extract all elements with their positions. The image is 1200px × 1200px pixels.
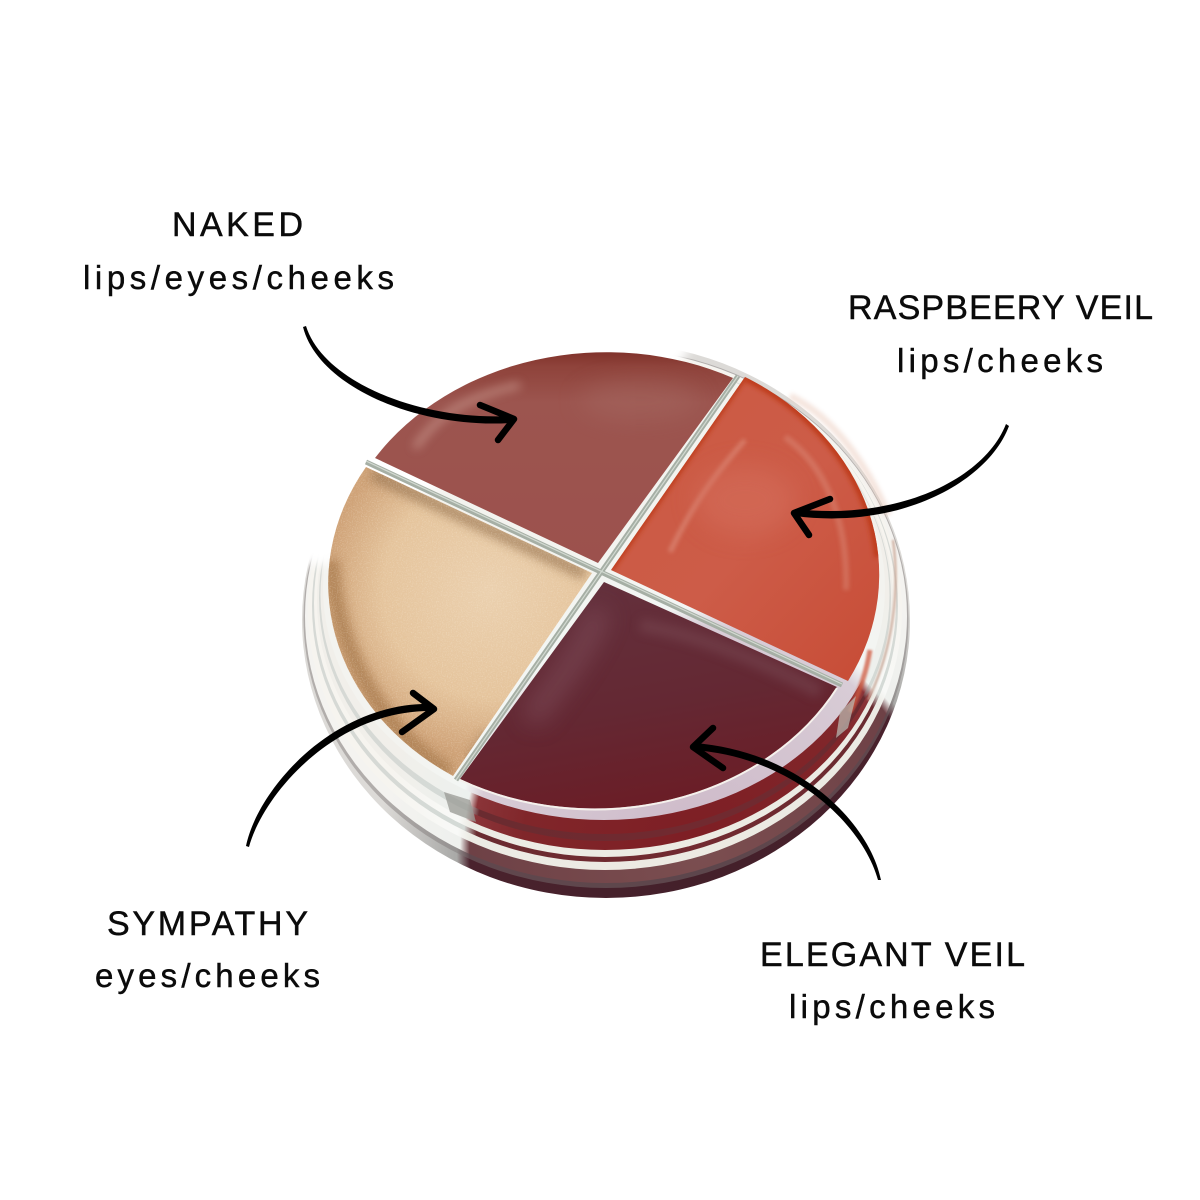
arrow: raspberry veil bbox=[794, 424, 1009, 535]
shade pan: elegant veil bbox=[450, 575, 845, 815]
case lip fragments bbox=[444, 696, 856, 822]
label: naked: lips/eyes/cheeks bbox=[83, 259, 394, 296]
label: raspberry veil: RASPBEERY VEIL bbox=[848, 289, 1153, 327]
reflection of the raspberry shade in the right rim bbox=[790, 396, 896, 712]
shade pan: naked bbox=[375, 352, 733, 563]
shade pan: raspberry veil bbox=[611, 377, 880, 681]
label: elegant veil: ELEGANT VEIL bbox=[760, 936, 1025, 974]
label: raspberry veil bbox=[848, 289, 1153, 379]
arrow: sympathy bbox=[246, 693, 434, 847]
palette compact bbox=[302, 352, 910, 898]
white cover hiding the case at the upper left bbox=[270, 240, 695, 566]
label: naked bbox=[83, 206, 394, 296]
infographic canvas bbox=[85, 212, 1152, 1026]
shade pan: sympathy bbox=[328, 467, 592, 776]
arrow: naked bbox=[303, 326, 514, 440]
label: sympathy: eyes/cheeks bbox=[95, 957, 320, 994]
label: elegant veil: lips/cheeks bbox=[789, 988, 995, 1025]
label: raspberry veil: lips/cheeks bbox=[897, 342, 1103, 379]
label: sympathy: SYMPATHY bbox=[107, 905, 308, 943]
label: sympathy bbox=[95, 905, 320, 994]
pan rim highlight bbox=[460, 688, 837, 809]
label: elegant veil bbox=[760, 936, 1025, 1025]
clear case body with stacked rings bbox=[302, 342, 910, 898]
label: naked: NAKED bbox=[172, 206, 303, 244]
arrow: elegant veil bbox=[693, 728, 881, 880]
divider cross bbox=[366, 376, 842, 780]
